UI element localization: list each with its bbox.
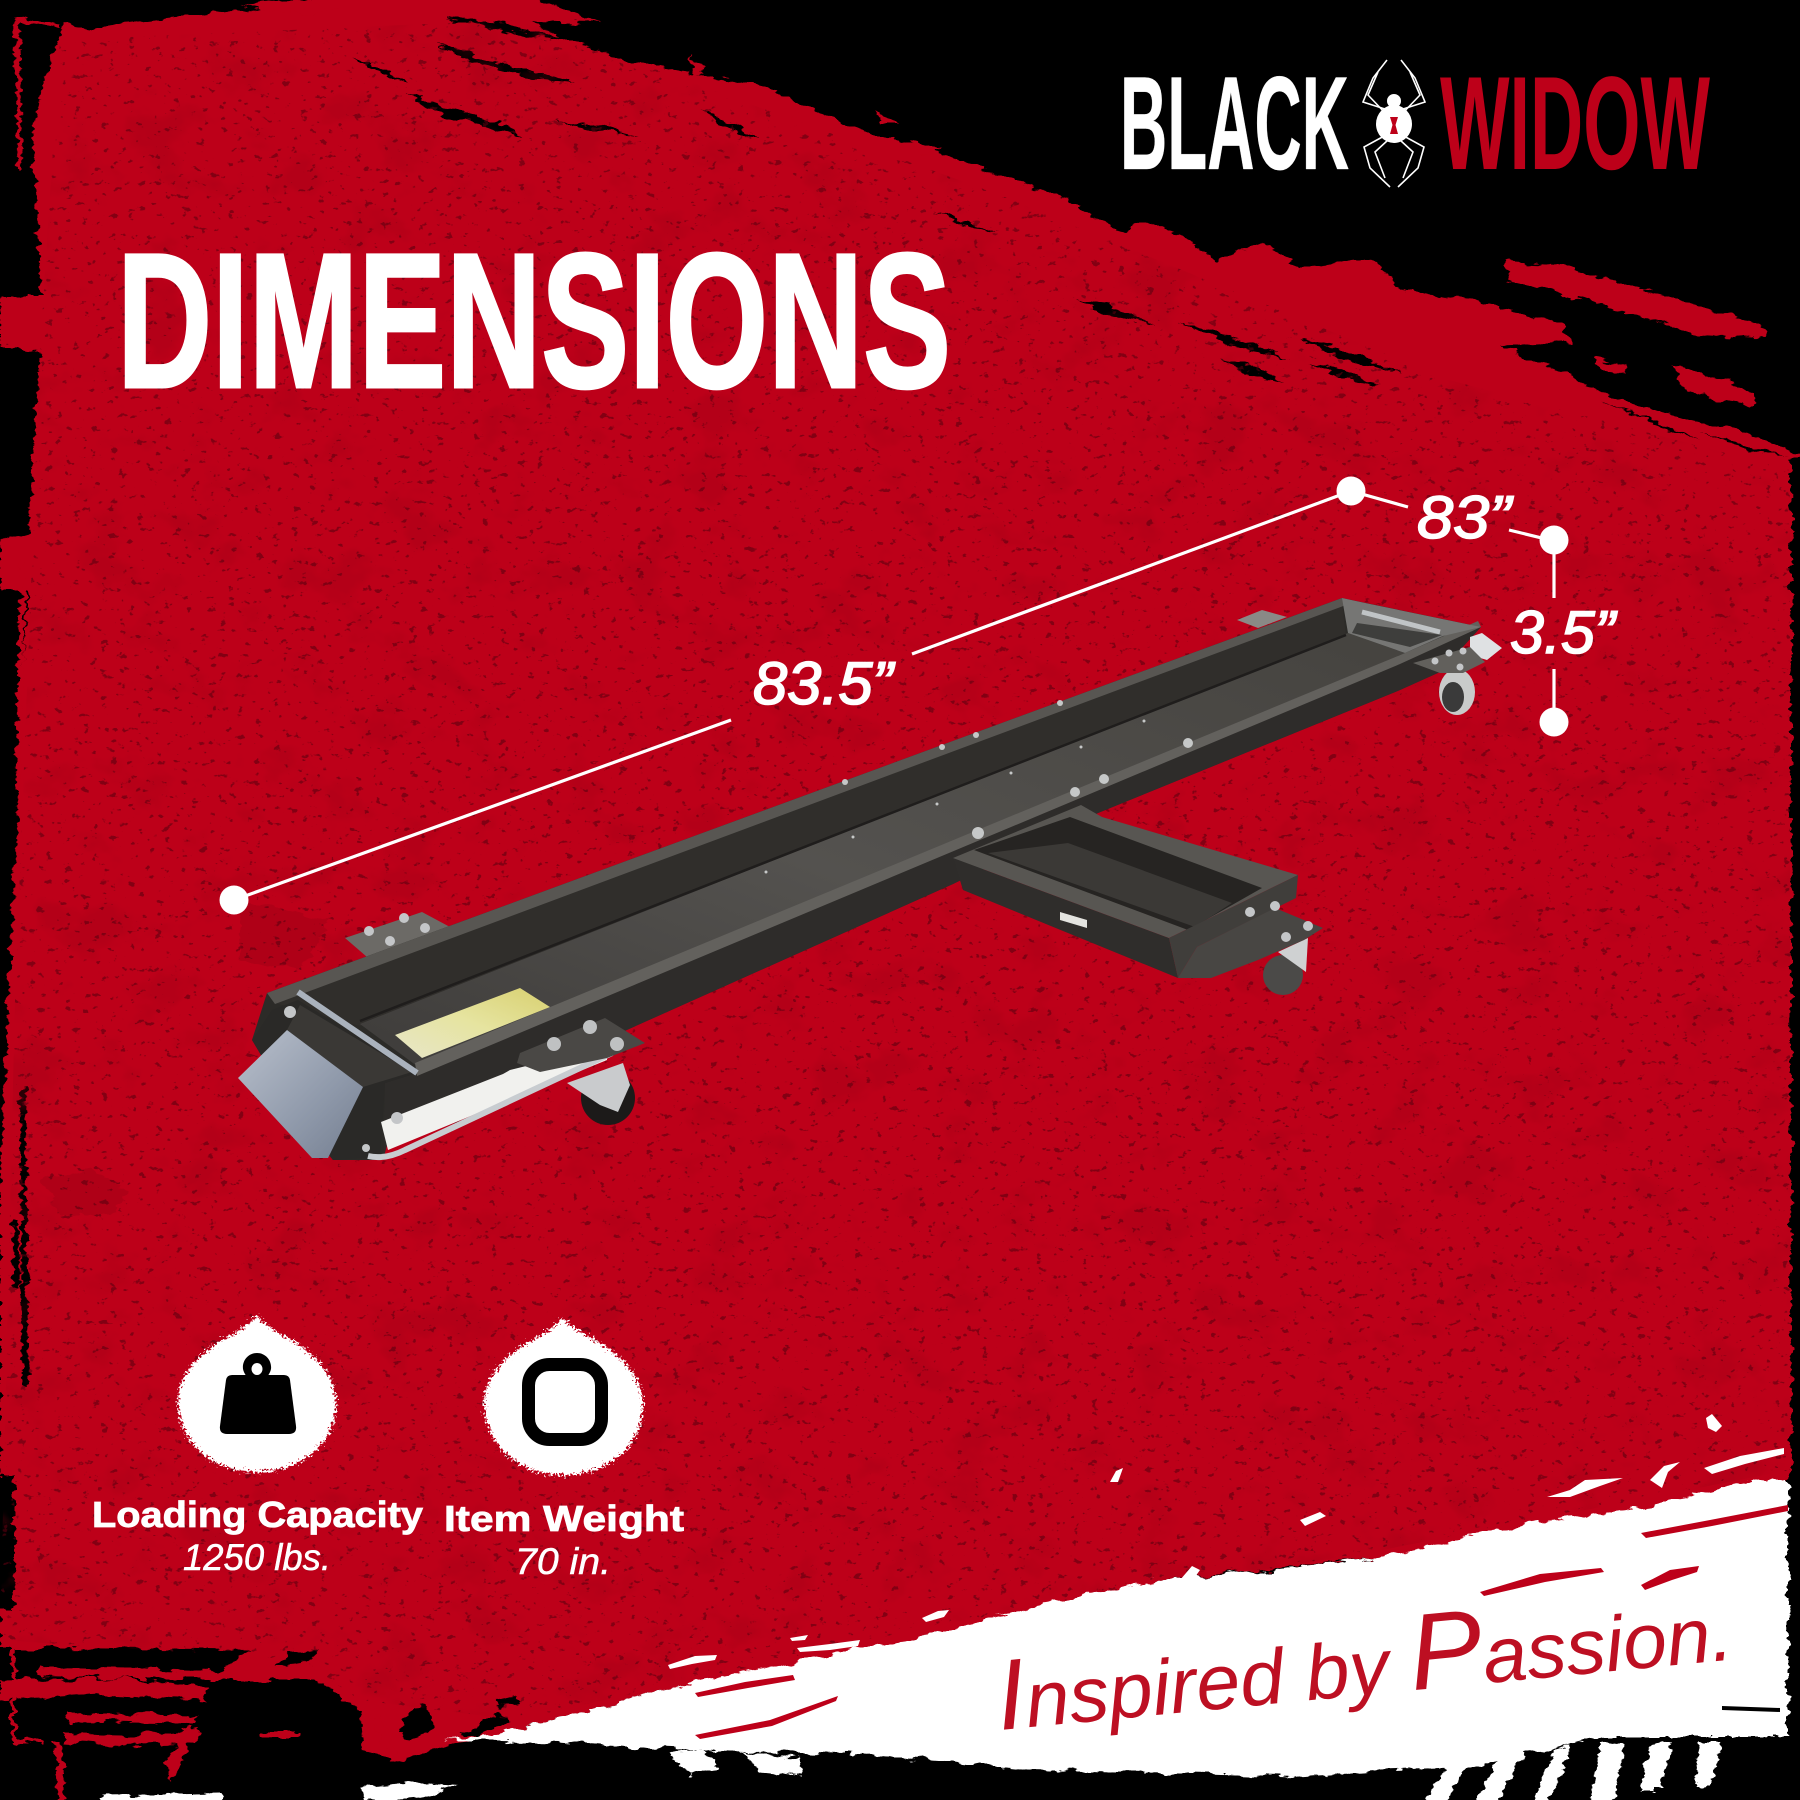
text: item weight [444,1498,684,1582]
dimension lines: width and height [1351,491,1554,722]
far caster wheel [1439,669,1475,715]
beam top rail [267,598,1346,1004]
white bar under beam [381,1046,607,1150]
far end window [1342,598,1481,653]
arm top rail [953,805,1298,938]
arm floor [988,843,1232,927]
tagline: Inspired by Passion. [991,1562,1737,1753]
icon: weight [220,1353,296,1434]
far left plate [345,912,450,957]
value: 1250 lbs: 1250 lbs. [183,1537,331,1578]
far right plate [1237,610,1287,628]
red scratches on white band [695,1505,1788,1739]
arm tag [1060,912,1087,928]
value: 70 in: 70 in. [515,1541,611,1582]
icon: item weight [484,1318,643,1475]
icon: rounded square [528,1364,602,1440]
beam front wall [383,627,1481,1160]
icon: loading capacity [178,1316,336,1472]
handle tube [368,1053,612,1157]
icon background: white burst [178,1316,336,1472]
black mark on white at right [1722,1706,1780,1712]
black slashes cut into red [60,0,1790,458]
near caster wheel [567,1063,635,1125]
logo icon: spider [1363,60,1425,187]
decal label [395,988,550,1058]
logo: BLACK [1120,50,1349,198]
beam front rail [415,621,1481,1076]
label: 83.5 inches: 83.5” [753,650,896,717]
dimension end dots [220,476,1568,914]
arm opening [974,817,1262,930]
beam silhouette [252,598,1481,1160]
beam back wall [275,604,1346,1026]
beam bolts and holes [764,700,1193,874]
darker red stains [40,900,330,1215]
near bolts [284,1006,403,1152]
beam groove line [360,635,1346,1021]
label: 83 inches: 83” [1417,484,1514,551]
galvanized ramp plate [238,1030,363,1158]
arm front wall [953,858,1178,978]
product: motorcycle dolly [238,598,1502,1160]
arm caster wheel [1263,938,1308,995]
T arm [953,805,1323,978]
text: item weight: Item Weight [444,1498,684,1539]
red scratch marks in black at top [240,0,945,155]
black marks lower left [0,1085,520,1738]
arm end skirt [1169,875,1298,978]
near plate with bolts [517,1018,645,1072]
arm bolts [1245,901,1313,942]
text: loading capacity [92,1494,423,1578]
near end inner [287,1005,412,1087]
rod [298,992,417,1073]
beam floor [360,633,1405,1066]
title: DIMENSIONS [117,213,951,428]
near end wall [252,1000,417,1160]
panel: white brush band [100,1477,1788,1800]
text: loading capacity: Loading Capacity [92,1494,423,1535]
far end plate with bolts [1413,633,1502,673]
arm mount plate [1178,908,1323,978]
dimension line: length 83.5 [234,491,1351,900]
icon background: white burst [484,1318,643,1475]
white flecks on red [668,1414,1784,1669]
label: 3.5 inches: 3.5” [1510,599,1618,666]
